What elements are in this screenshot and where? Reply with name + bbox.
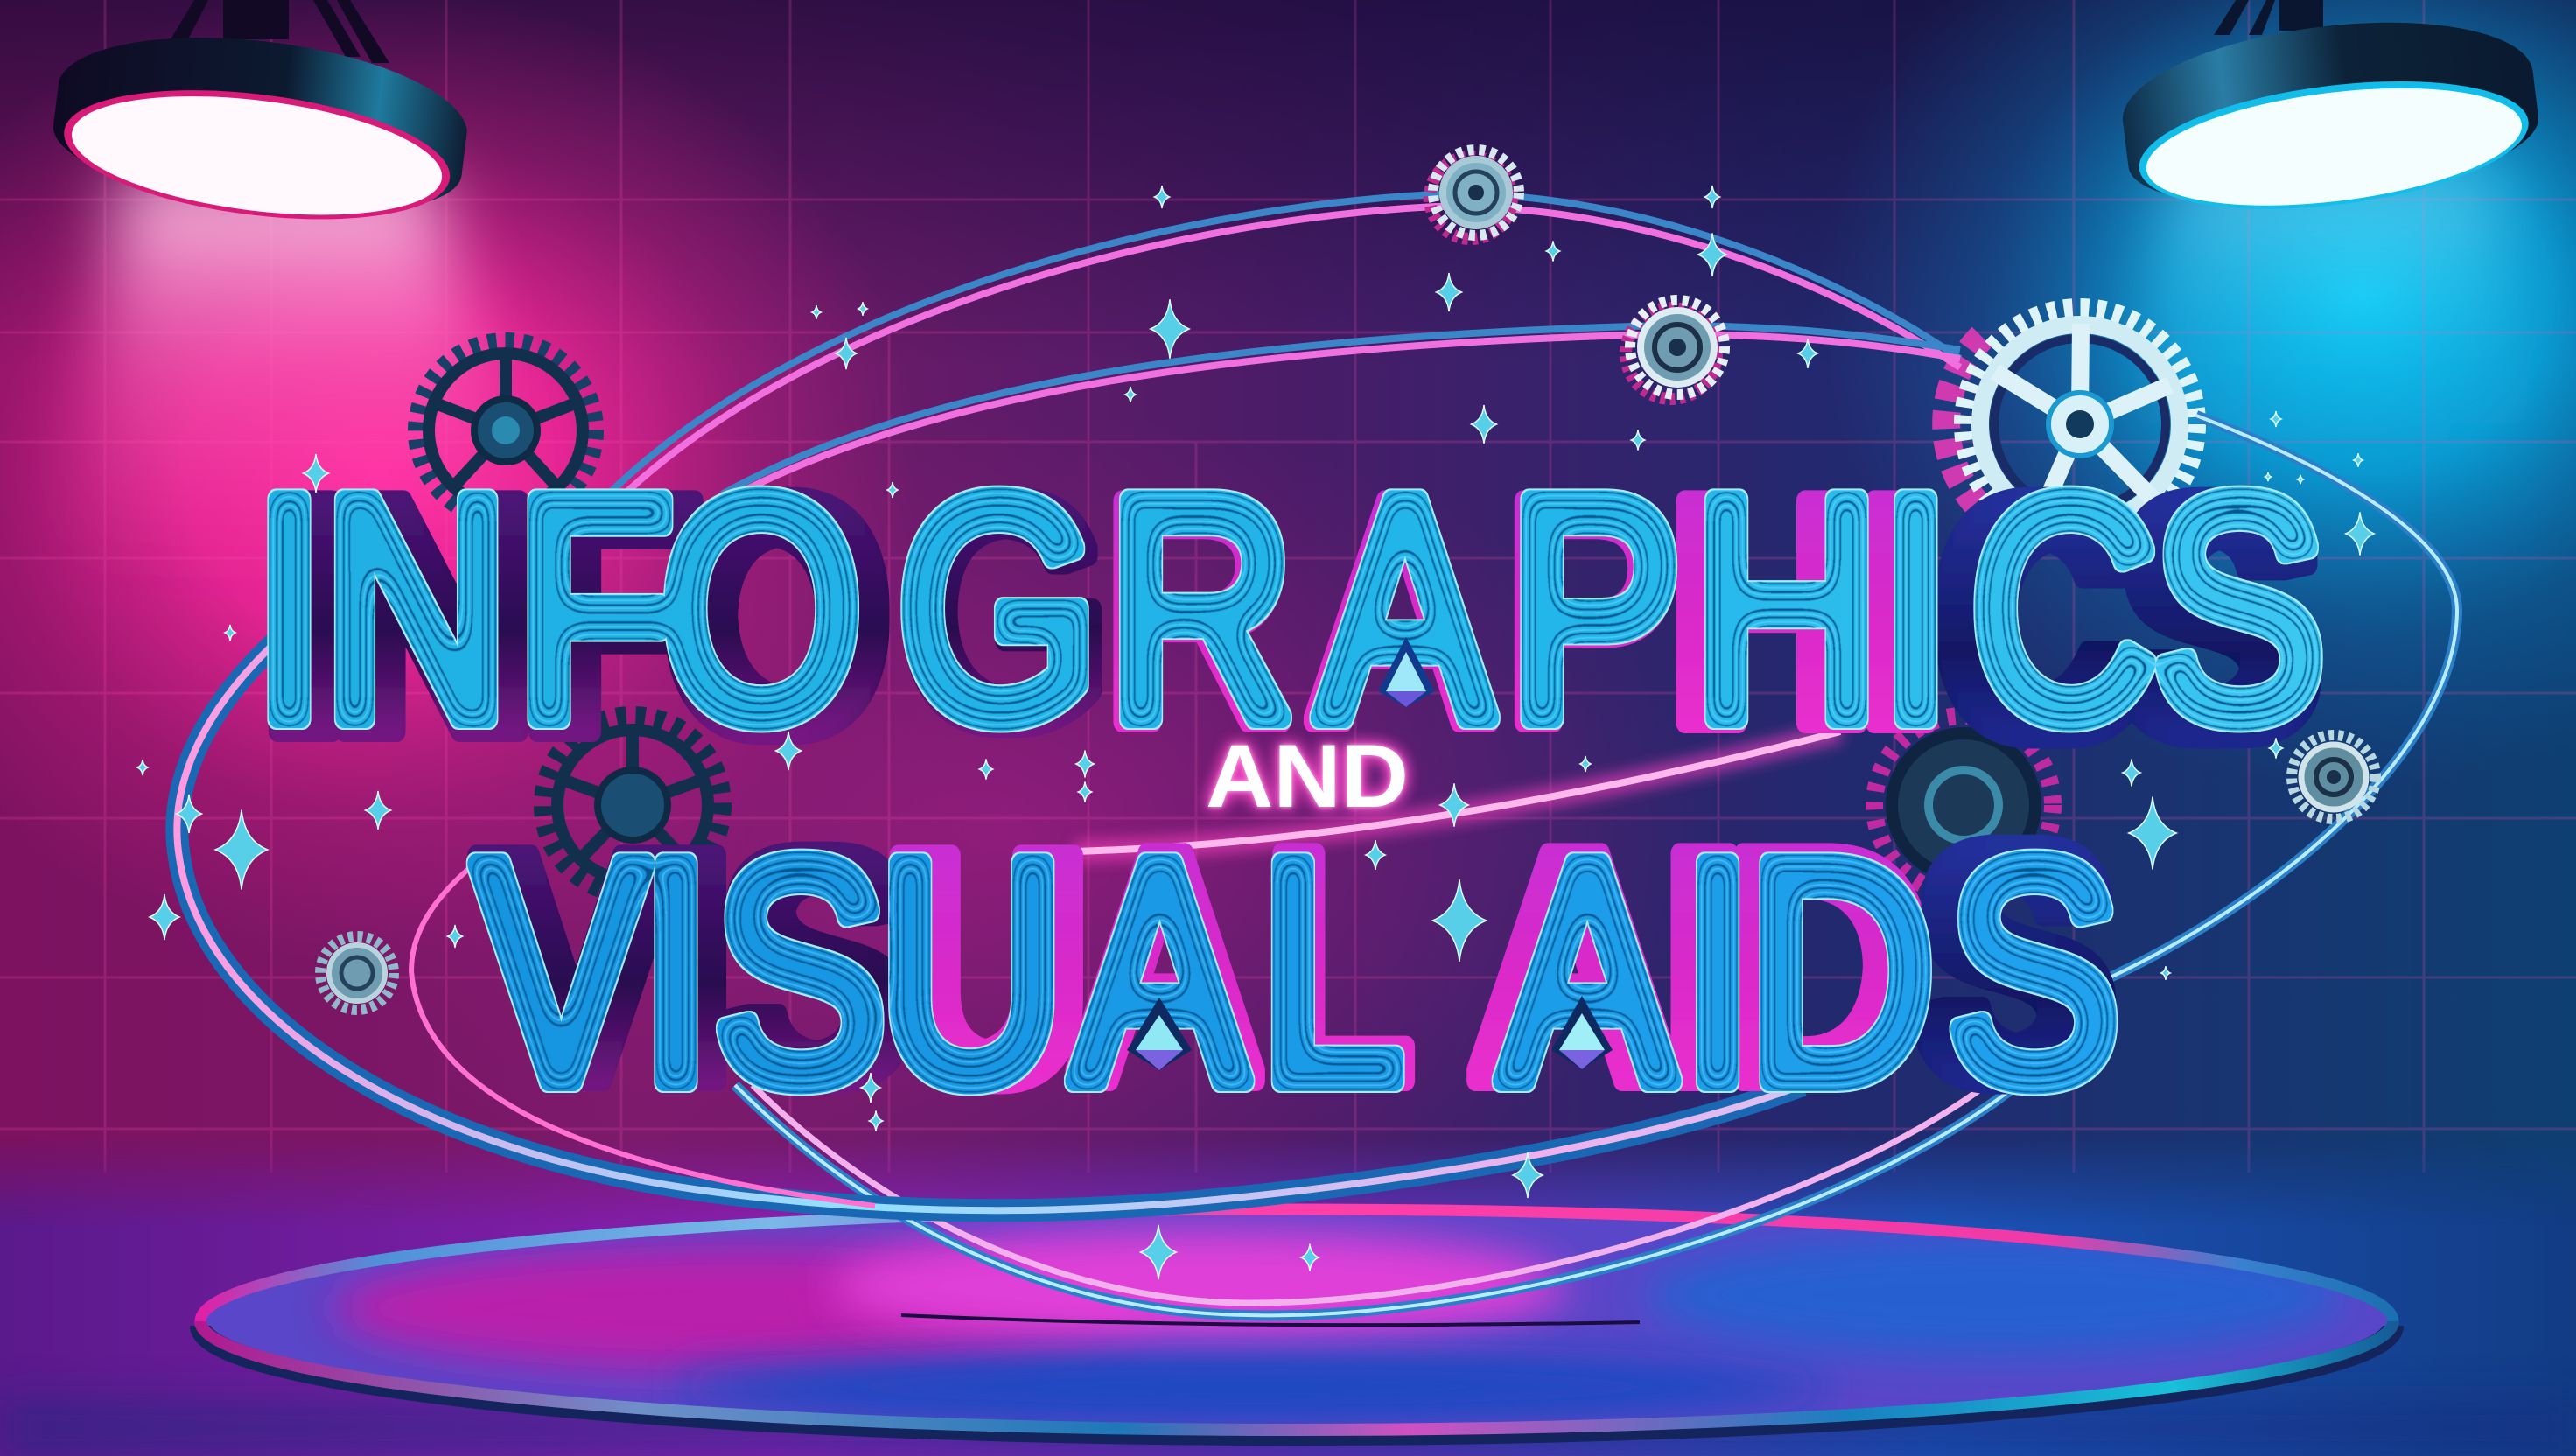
lamp: left bbox=[46, 0, 475, 240]
stage ring and disc bbox=[175, 1199, 2415, 1444]
title line: VISUAL AIDS: VISUAL AIDS bbox=[475, 795, 2119, 1148]
light beam: cyan bbox=[2100, 166, 2555, 560]
glow arc bbox=[1074, 732, 1840, 851]
sparkles bbox=[137, 186, 2374, 1279]
gear: small top bbox=[1430, 150, 1519, 239]
title word: AND: AND bbox=[1206, 726, 1409, 826]
title line: VISUAL AIDS: S bbox=[1947, 795, 2119, 1148]
title line: INFOGRAPHICS: INFO bbox=[253, 432, 862, 785]
strands: upper arcs bbox=[604, 194, 1960, 502]
title line: INFOGRAPHICS: INFOGRAPHICS bbox=[253, 432, 2325, 785]
title line: VISUAL AIDS: AL bbox=[1074, 795, 1404, 1148]
gear: small right bbox=[2292, 735, 2376, 819]
gear: dark lower right bbox=[1874, 716, 2053, 894]
gear: dark lower left bbox=[543, 716, 722, 894]
lamp: right bbox=[2114, 0, 2546, 229]
title bbox=[253, 432, 2325, 1148]
title line: INFOGRAPHICS: RAP bbox=[1108, 432, 1681, 785]
gear: dark upper left bbox=[416, 341, 595, 520]
diamond accents in letter A bbox=[1127, 637, 1613, 1070]
title line: INFOGRAPHICS: HI bbox=[1693, 432, 1951, 785]
strands: lower main band bbox=[177, 630, 1802, 1210]
title line: VISUAL AIDS: VIS bbox=[475, 795, 886, 1148]
gear: small lower left bbox=[320, 936, 394, 1010]
title line: VISUAL AIDS: U bbox=[878, 795, 1065, 1148]
floor bbox=[0, 1138, 2576, 1456]
title line: INFOGRAPHICS: CS bbox=[1970, 432, 2325, 785]
light beam: pink bbox=[70, 175, 542, 578]
title line: VISUAL AIDS: AID bbox=[1501, 795, 1935, 1148]
title line: INFOGRAPHICS: G bbox=[898, 432, 1098, 785]
gear: large white upper right bbox=[1946, 308, 2196, 541]
strands: right arc and lower V loop bbox=[735, 416, 2457, 1315]
gear: small middle bbox=[1626, 300, 1725, 399]
